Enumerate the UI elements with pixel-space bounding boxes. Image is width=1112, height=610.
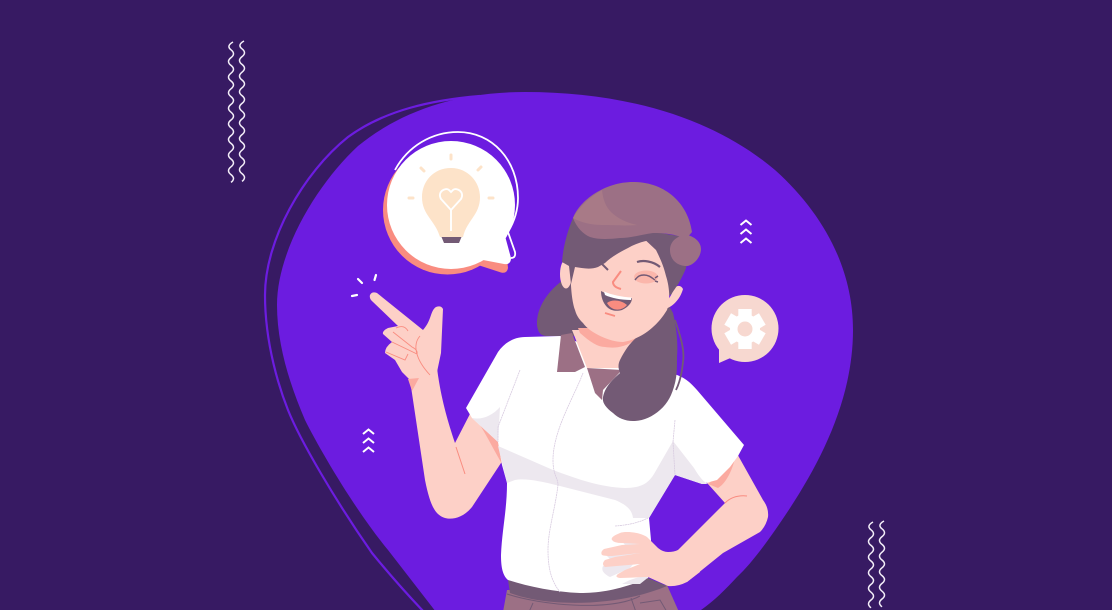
bubble [387, 141, 515, 269]
shirt [466, 336, 744, 593]
teeth [604, 292, 632, 300]
hair strand [675, 320, 683, 390]
bubble shadow [383, 146, 512, 274]
arm crease [725, 496, 747, 503]
bubble [712, 295, 778, 363]
chevrons right [740, 220, 752, 243]
bulb rays [409, 155, 493, 198]
back hair left [537, 278, 590, 336]
pointing hand [370, 292, 443, 382]
lower lip [605, 313, 615, 316]
tongue [607, 301, 627, 310]
hand on hip [601, 532, 700, 586]
left arm [410, 368, 510, 519]
side hair [658, 240, 688, 294]
pants seams [507, 594, 667, 610]
eye tick [602, 264, 608, 270]
finger shadows [602, 540, 650, 584]
finger lines [386, 327, 430, 375]
outer outline of blob [265, 96, 480, 610]
hair bun [670, 235, 701, 266]
nose [613, 271, 621, 289]
chevrons left [363, 430, 374, 452]
collar left [557, 333, 585, 372]
neck shadow [578, 328, 640, 348]
purple blob [277, 92, 853, 610]
left ear [560, 260, 572, 288]
woman [370, 182, 768, 610]
hair top [573, 182, 692, 239]
shirt seams [498, 370, 675, 592]
sparkle marks [352, 275, 376, 296]
bulb [422, 168, 480, 237]
upper right arm [668, 450, 768, 582]
wrist shadow [408, 378, 419, 391]
lightbulb speech bubble [383, 132, 518, 274]
arm shadow [708, 458, 735, 488]
right eye and cheek [634, 270, 658, 284]
fringe [562, 218, 690, 284]
mouth [601, 291, 632, 311]
bubble outline [395, 132, 518, 258]
bulb base [442, 237, 462, 243]
wavy lines bottom right [868, 521, 884, 608]
right ear [665, 286, 683, 309]
heart filament [440, 189, 462, 231]
pants [503, 585, 679, 610]
shirt shadow [472, 407, 708, 518]
arm shadow and crease [480, 425, 502, 464]
gear [724, 309, 766, 349]
long hair right [603, 290, 677, 421]
neck [572, 330, 640, 368]
belt [508, 578, 667, 603]
face [571, 235, 669, 342]
wavy lines top left [228, 41, 244, 182]
collar right [587, 368, 622, 400]
hair highlight [573, 190, 637, 225]
gear speech bubble [712, 295, 778, 363]
hair back of head [564, 225, 688, 300]
